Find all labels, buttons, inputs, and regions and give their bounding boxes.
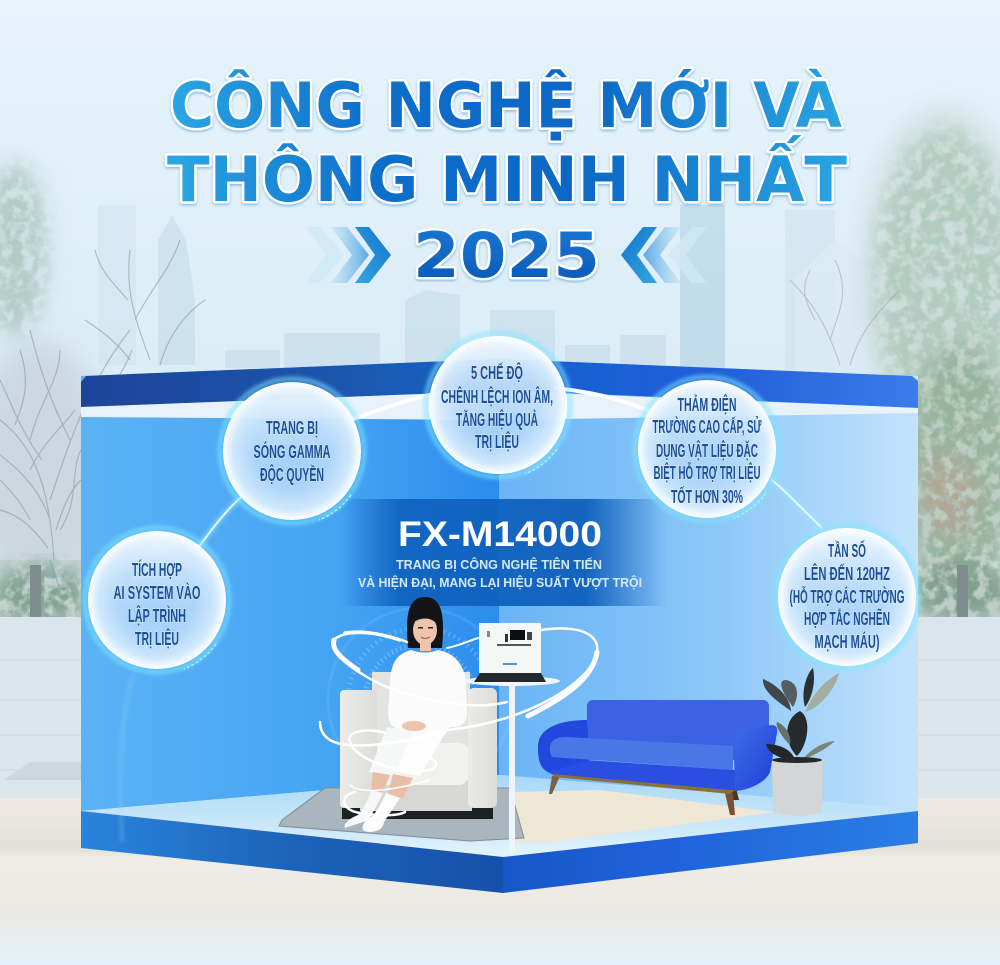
floor front lip left xyxy=(81,811,503,893)
title: CÔNG NGHỆ MỚI VÀ xyxy=(170,69,842,142)
person seated xyxy=(345,597,467,832)
bubble: ion modes xyxy=(426,333,570,477)
center product panel xyxy=(342,499,667,606)
icon: right chevrons xyxy=(621,227,706,283)
stand top xyxy=(464,676,560,686)
bubble: ion modes: 5 CHẾ ĐỘ xyxy=(471,362,523,383)
tray xyxy=(474,673,546,682)
device body xyxy=(479,623,541,673)
title: THÔNG MINH NHẤT xyxy=(167,135,847,216)
legs xyxy=(549,776,739,815)
device screen xyxy=(510,630,525,640)
bubble: AI system: TRỊ LIỆU xyxy=(135,628,179,649)
product description xyxy=(358,557,642,590)
rug xyxy=(512,790,775,843)
top blue band left xyxy=(81,359,499,407)
hands xyxy=(402,721,426,731)
right arm xyxy=(734,725,777,791)
pot xyxy=(772,758,823,816)
stand pole xyxy=(509,680,515,852)
bubble: electric mat: THẢM ĐIỆN xyxy=(678,394,736,415)
energy swoosh rings xyxy=(320,628,597,815)
model name: FX-M14000 xyxy=(398,515,602,554)
connector lines xyxy=(120,388,822,840)
bubble: frequency: (HỖ TRỢ CÁC TRƯỜNG xyxy=(790,586,904,607)
bubble: AI system: AI SYSTEM VÀO xyxy=(114,582,200,603)
product description: VÀ HIỆN ĐẠI, MANG LẠI HIỆU SUẤT VƯỢT TRỘI xyxy=(358,575,642,590)
torso xyxy=(388,650,467,735)
treatment mat xyxy=(279,788,524,841)
backrest xyxy=(587,700,769,760)
year 2025 with chevrons xyxy=(306,219,706,292)
bubble: gamma xyxy=(220,379,364,523)
bubble: electric mat xyxy=(635,377,779,521)
background trees left xyxy=(0,160,205,625)
background city skyline xyxy=(98,205,860,370)
bubble: AI system: LẬP TRÌNH xyxy=(128,605,186,626)
bubble: ion modes: TRỊ LIỆU xyxy=(475,431,519,452)
bubble: frequency: HỢP TẮC NGHẼN xyxy=(804,608,890,629)
sofa xyxy=(538,700,777,815)
bubble: frequency xyxy=(775,525,919,669)
base rail xyxy=(550,773,735,794)
background plaza xyxy=(0,617,1000,965)
left arm xyxy=(538,720,590,772)
bubble: electric mat: BIỆT HỖ TRỢ TRỊ LIỆU xyxy=(654,462,760,483)
bubble: frequency: LÊN ĐẾN 120HZ xyxy=(804,563,890,584)
bubble: frequency: TẦN SỐ xyxy=(828,540,866,561)
room stage xyxy=(81,359,918,893)
bubble: gamma: ĐỘC QUYỀN xyxy=(260,464,324,485)
armchair xyxy=(340,672,497,819)
bubble: AI system xyxy=(85,528,229,672)
device on stand xyxy=(464,623,560,852)
title xyxy=(167,69,847,216)
right thigh xyxy=(396,727,449,776)
bottom body xyxy=(540,757,745,790)
energy rings behind person xyxy=(328,608,512,792)
background sky xyxy=(0,0,1000,620)
socks xyxy=(345,790,383,828)
white strip xyxy=(81,391,918,420)
bubble: electric mat: TRƯỜNG CAO CẤP, SỬ xyxy=(652,416,762,437)
bubble: frequency: MẠCH MÁU) xyxy=(814,631,880,652)
bubble: electric mat: DỤNG VẬT LIỆU ĐẶC xyxy=(656,440,758,461)
right wall xyxy=(499,359,918,809)
face xyxy=(413,615,437,651)
bubble: electric mat: TỐT HƠN 30% xyxy=(671,486,743,507)
hair xyxy=(407,597,443,648)
bubble: ion modes: TĂNG HIỆU QUẢ xyxy=(456,409,538,430)
floor front lip right xyxy=(503,811,918,893)
top blue band right xyxy=(499,359,918,408)
plant xyxy=(763,668,839,816)
left wall xyxy=(81,359,499,811)
bubble: ion modes: CHÊNH LỆCH ION ÂM, xyxy=(441,386,553,407)
shins xyxy=(371,772,390,794)
bubble: gamma: TRANG BỊ xyxy=(266,418,318,438)
icon: left chevrons xyxy=(306,227,391,283)
left thigh xyxy=(369,727,422,776)
bubble: AI system: TÍCH HỢP xyxy=(132,559,182,580)
leaves xyxy=(763,668,839,760)
background trees right xyxy=(790,110,1000,620)
product description: TRANG BỊ CÔNG NGHỆ TIÊN TIẾN xyxy=(396,557,602,572)
year text: 2025 xyxy=(413,219,600,292)
bubble: gamma: SÓNG GAMMA xyxy=(254,441,330,462)
floor xyxy=(81,775,918,857)
seat cushion xyxy=(550,737,733,770)
